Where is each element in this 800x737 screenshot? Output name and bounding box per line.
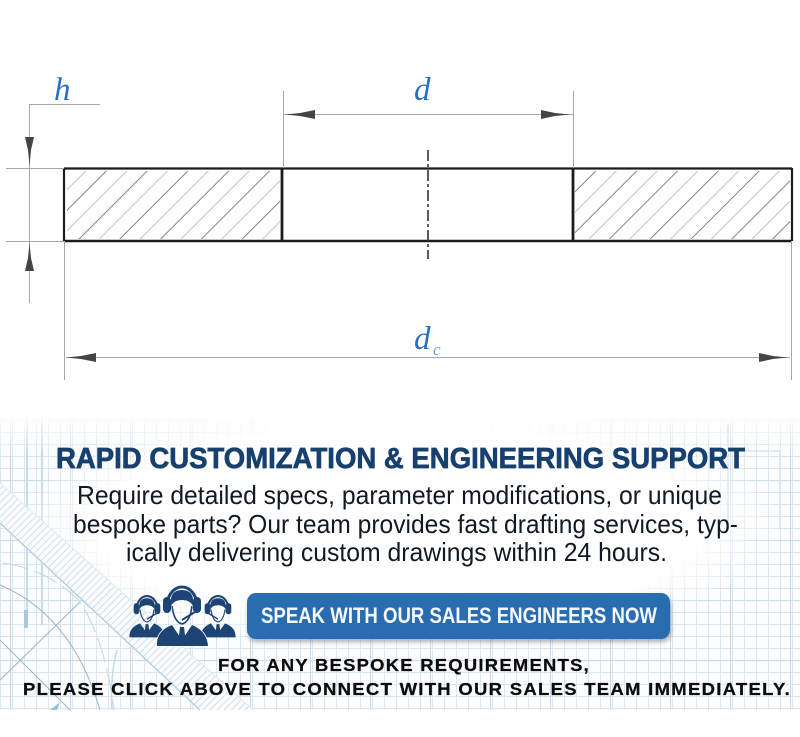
panel: blueprint background (0, 400, 800, 710)
body line 1: Require detailed specs, parameter modifications, or unique (77, 480, 722, 510)
icon: left agent (129, 596, 164, 637)
footer line 1: FOR ANY BESPOKE REQUIREMENTS, (218, 655, 590, 675)
dimension: d: d (414, 72, 431, 108)
body line 2: bespoke parts? Our team provides fast drafting services, typ- (73, 509, 738, 539)
hatched section: left (67, 171, 280, 239)
footer line 2: PLEASE CLICK ABOVE TO CONNECT WITH OUR SALES TEAM IMMEDIATELY. (23, 679, 791, 699)
panel: technical drawing (6, 72, 792, 380)
body text (73, 480, 738, 567)
washer section outline (64, 168, 792, 241)
dimension: dc (64, 241, 792, 380)
dimension: dc: c (433, 340, 441, 359)
centre line (427, 150, 429, 259)
icon: right agent (200, 596, 236, 637)
button: speak with sales engineers (247, 593, 670, 639)
button: speak with sales engineers: SPEAK WITH OUR SALES ENGINEERS NOW (261, 603, 657, 628)
body line 3: ically delivering custom drawings within 24 hours. (126, 537, 667, 567)
dimension: h (6, 72, 100, 303)
footer call to action (23, 655, 791, 699)
icon: sales engineers with headsets (129, 587, 236, 646)
icon: centre agent (157, 587, 208, 646)
heading: RAPID CUSTOMIZATION & ENGINEERING SUPPORT (56, 443, 746, 475)
dimension: h: h (54, 72, 70, 108)
hatched section: right (575, 171, 790, 239)
dimension: dc: d (414, 321, 431, 357)
dimension: d (283, 72, 574, 168)
